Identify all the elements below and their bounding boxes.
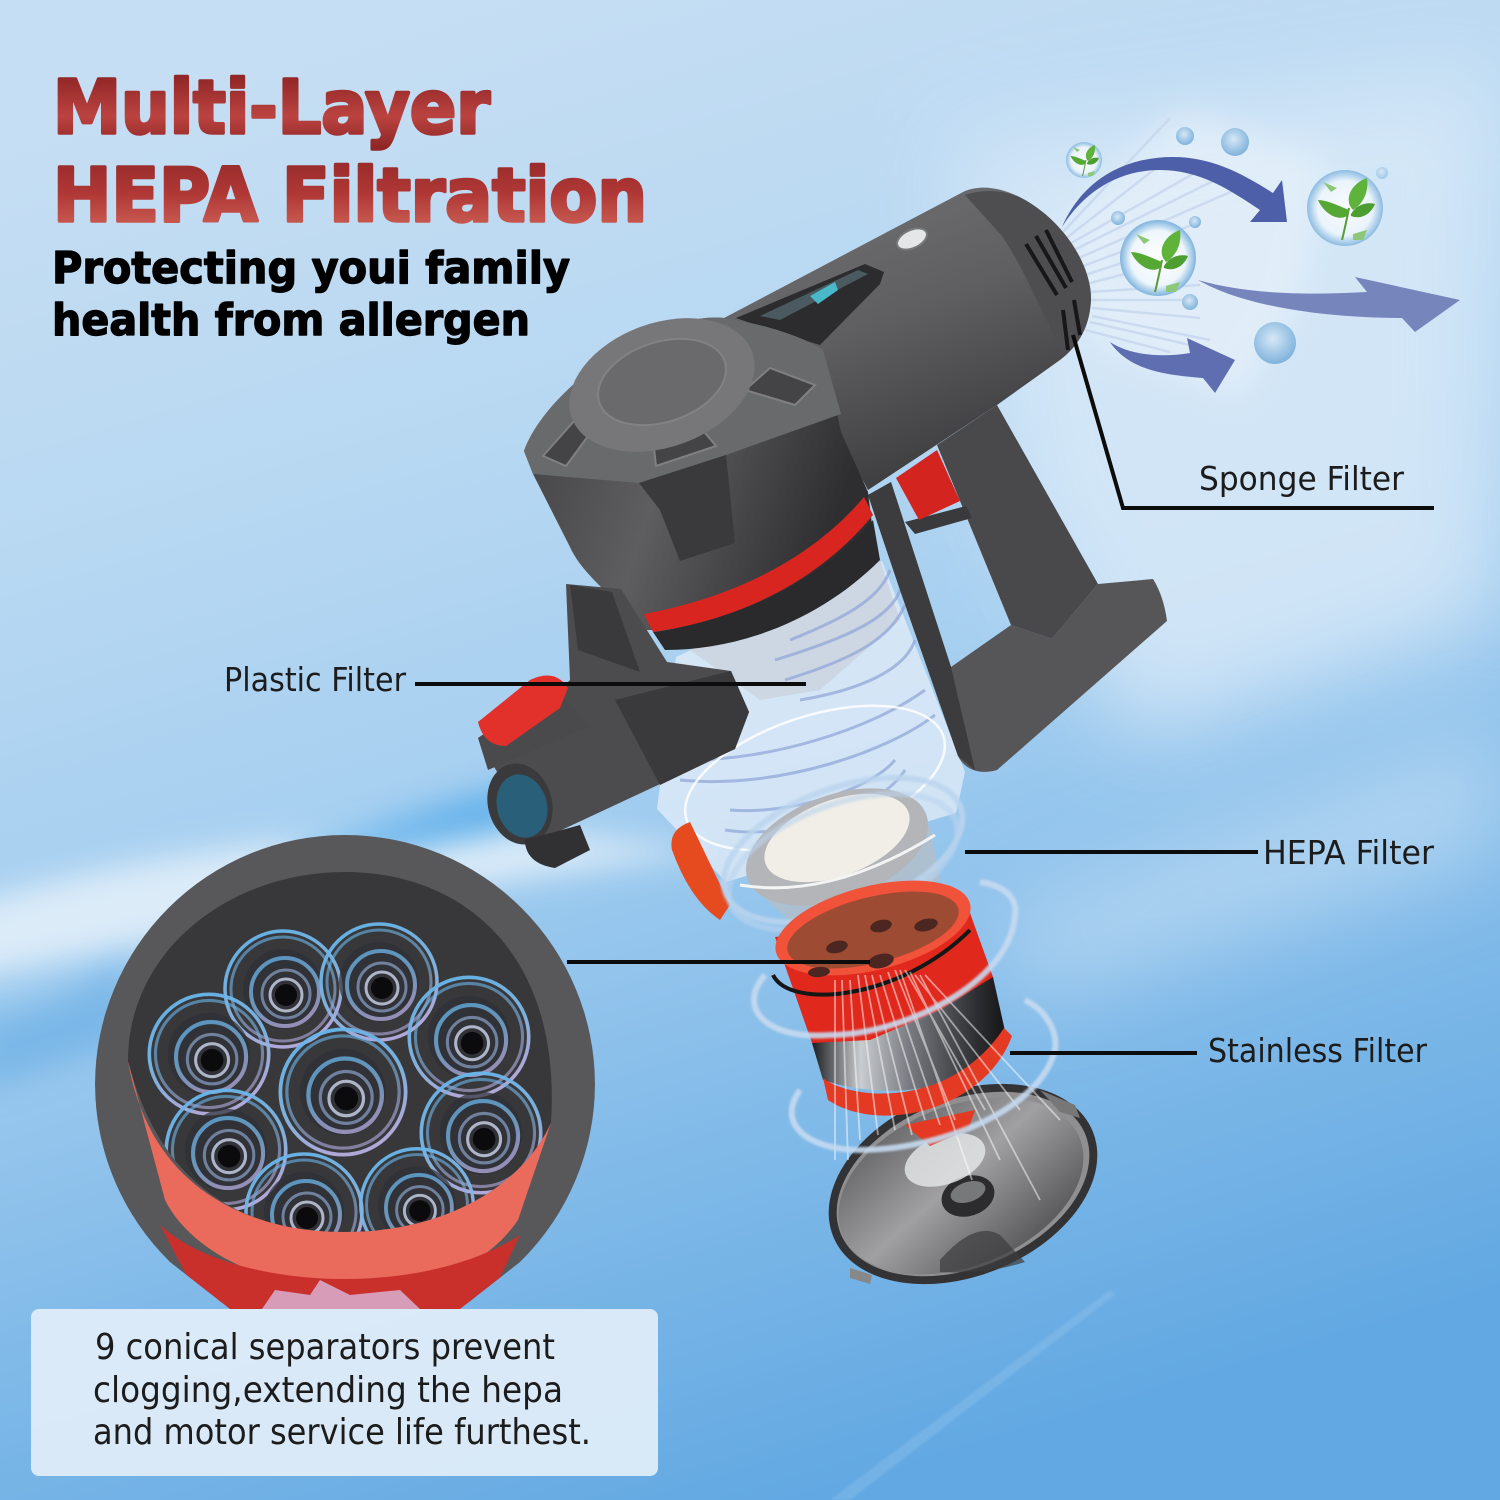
callout panel bbox=[31, 1309, 658, 1476]
inset: nine conical separators bbox=[95, 835, 595, 1335]
dark underside bbox=[653, 520, 880, 650]
leaf bubble: small bbox=[1066, 142, 1102, 178]
nozzle collar bbox=[478, 686, 590, 770]
callout text bbox=[93, 1327, 591, 1453]
bottom red ring bbox=[823, 1028, 1012, 1116]
red band bbox=[644, 497, 873, 632]
label: Sponge Filter: Sponge Filter bbox=[1199, 459, 1404, 498]
vacuum cleaner body bbox=[478, 188, 1167, 920]
hepa filter bbox=[730, 766, 944, 930]
subtitle bbox=[52, 243, 570, 346]
red dust cup rim bbox=[128, 1061, 551, 1287]
arrow: lower bbox=[1110, 338, 1235, 393]
subtitle: health from allergen bbox=[52, 295, 530, 346]
air flow and purified air bbox=[1060, 110, 1460, 400]
dustbin lid bbox=[799, 1046, 1127, 1322]
subtitle: Protecting youi family bbox=[52, 243, 570, 294]
water streaks bbox=[835, 970, 1060, 1200]
small red cone tip bbox=[905, 1110, 975, 1146]
trigger bbox=[896, 450, 960, 520]
red release button bbox=[478, 676, 568, 746]
callout text: 9 conical separators prevent bbox=[95, 1327, 555, 1368]
arrow: upper curved bbox=[1062, 157, 1287, 227]
water droplets bbox=[1111, 127, 1388, 364]
label: Stainless Filter: Stainless Filter bbox=[1208, 1031, 1427, 1070]
lid disc bbox=[551, 294, 773, 476]
title bbox=[53, 65, 647, 239]
dust cup bbox=[524, 317, 873, 630]
lower swirl rings bbox=[754, 882, 1055, 1150]
nozzle neck bbox=[490, 584, 749, 841]
cup ribs bbox=[543, 368, 815, 466]
title: HEPA Filtration bbox=[53, 153, 647, 239]
callout text: and motor service life furthest. bbox=[93, 1412, 591, 1453]
title: Multi-Layer bbox=[53, 65, 490, 151]
nozzle lug bbox=[525, 825, 590, 868]
arrow: middle bbox=[1198, 277, 1460, 332]
power button bbox=[894, 224, 930, 254]
red plastic filter cup bbox=[766, 863, 993, 1043]
orange bin latch bbox=[671, 822, 730, 920]
label: HEPA Filter: HEPA Filter bbox=[1263, 833, 1434, 872]
hepa swirl rings bbox=[704, 749, 982, 958]
handle and battery base bbox=[868, 405, 1167, 772]
display panel bbox=[736, 264, 884, 345]
leader lines bbox=[415, 335, 1434, 1053]
motor cylinder bbox=[724, 188, 1091, 490]
label: Plastic Filter: Plastic Filter bbox=[224, 660, 406, 699]
separator rings bbox=[149, 924, 541, 1270]
steel mesh cylinder bbox=[812, 977, 1007, 1091]
filter stack bbox=[704, 749, 1127, 1322]
callout text: clogging,extending the hepa bbox=[93, 1370, 563, 1411]
leaf bubble: centre bbox=[1120, 220, 1196, 296]
vent slots bbox=[1026, 230, 1080, 350]
nozzle mouth bbox=[478, 756, 562, 852]
clear dust bin bbox=[657, 560, 965, 882]
leaf bubble: right bbox=[1307, 170, 1383, 246]
cup notch bbox=[639, 455, 735, 561]
